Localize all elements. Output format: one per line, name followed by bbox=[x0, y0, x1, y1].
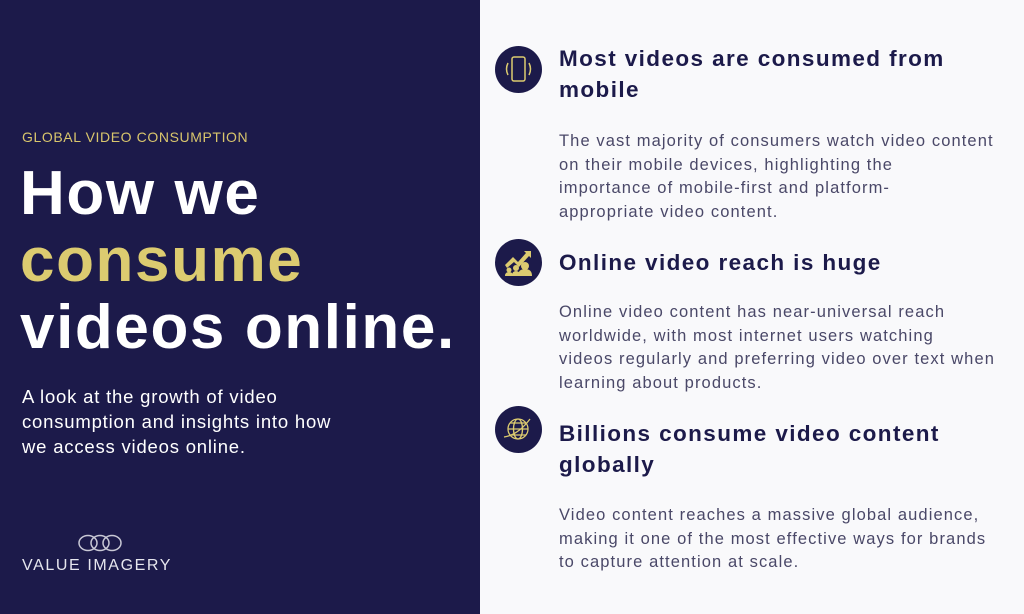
logo bbox=[22, 534, 172, 573]
icon: globe bbox=[495, 406, 542, 453]
icon: growth bbox=[495, 239, 542, 286]
text: Online video content has near-universal reach bbox=[559, 303, 945, 321]
text: worldwide, with most internet users watching bbox=[559, 326, 934, 344]
text: on their mobile devices, highlighting the bbox=[559, 156, 893, 174]
text: learning about products. bbox=[559, 374, 762, 392]
kicker: GLOBAL VIDEO CONSUMPTION bbox=[22, 129, 248, 145]
text: making it one of the most effective ways for brands bbox=[559, 530, 986, 548]
title: How we bbox=[20, 159, 260, 228]
item: mobile bbox=[495, 46, 994, 220]
icon: phone bbox=[495, 46, 542, 93]
subtitle: we access videos online. bbox=[22, 436, 246, 457]
subtitle: consumption and insights into how bbox=[22, 411, 331, 432]
heading bbox=[559, 421, 940, 477]
subtitle: A look at the growth of video bbox=[22, 386, 278, 407]
heading: globally bbox=[559, 452, 655, 477]
left panel bbox=[0, 0, 480, 614]
text: importance of mobile-first and platform- bbox=[559, 179, 890, 197]
text: to capture attention at scale. bbox=[559, 553, 799, 571]
item: global bbox=[495, 406, 986, 571]
text bbox=[559, 303, 995, 392]
heading bbox=[559, 46, 945, 102]
text: videos regularly and preferring video over text when bbox=[559, 350, 995, 368]
title: consume bbox=[20, 226, 303, 295]
heading: Online video reach is huge bbox=[559, 250, 882, 275]
title: videos online. bbox=[20, 293, 456, 362]
item: reach bbox=[495, 239, 995, 392]
title bbox=[20, 159, 456, 362]
text bbox=[559, 132, 994, 220]
text: appropriate video content. bbox=[559, 202, 778, 220]
subtitle bbox=[22, 386, 331, 457]
heading: Billions consume video content bbox=[559, 421, 940, 446]
text: Video content reaches a massive global audience, bbox=[559, 506, 979, 524]
heading: mobile bbox=[559, 77, 640, 102]
text bbox=[559, 506, 986, 571]
text: The vast majority of consumers watch video content bbox=[559, 132, 994, 150]
heading: Most videos are consumed from bbox=[559, 46, 945, 71]
